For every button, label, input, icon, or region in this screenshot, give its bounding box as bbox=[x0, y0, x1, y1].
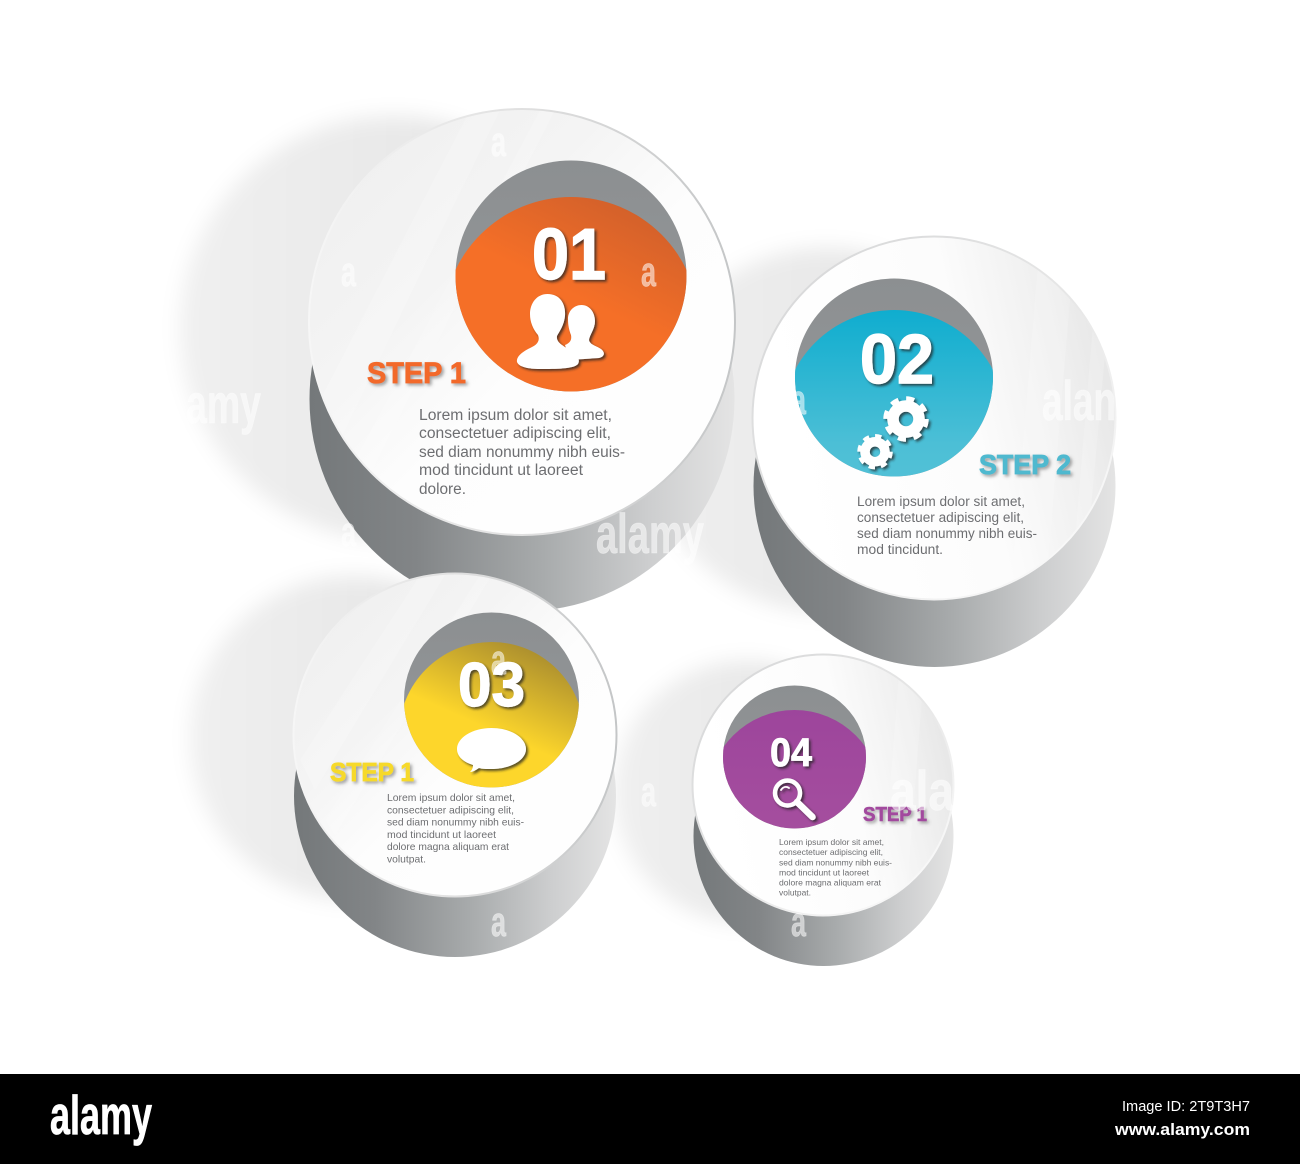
purple lens 4 bbox=[723, 710, 866, 828]
cut-out hole 3 bbox=[404, 612, 579, 788]
image id: Image ID: 2T9T3H7 bbox=[1122, 1098, 1250, 1115]
panel: step 4 bbox=[692, 654, 954, 966]
text block 4: sed diam nonummy nibh euis- bbox=[779, 858, 892, 868]
website: www.alamy.com bbox=[1114, 1120, 1250, 1139]
number 02: 02 bbox=[860, 320, 934, 398]
text block 4: mod tincidunt ut laoreet bbox=[779, 868, 870, 878]
watermarks: a bbox=[491, 898, 506, 945]
cylinder side 2 bbox=[754, 305, 1116, 667]
icon: speech bubble bbox=[457, 728, 526, 772]
text block 3: mod tincidunt ut laoreet bbox=[387, 830, 496, 841]
number 01: 01 bbox=[532, 215, 606, 295]
watermarks: a bbox=[341, 508, 356, 555]
footer logo: alamy bbox=[50, 1084, 152, 1146]
top disc 2 bbox=[752, 236, 1116, 600]
text block 3: Lorem ipsum dolor sit amet, bbox=[387, 793, 515, 804]
text block 1: consectetuer adipiscing elit, bbox=[419, 425, 611, 442]
step label 2: STEP 2 bbox=[979, 449, 1071, 480]
text block 2: consectetuer adipiscing elit, bbox=[857, 510, 1024, 525]
cut-out hole 4 bbox=[723, 686, 866, 828]
top disc 3 bbox=[294, 574, 616, 896]
top disc 4 bbox=[692, 654, 954, 916]
cylinder side 3 bbox=[294, 635, 616, 957]
text block 4: dolore magna aliquam erat bbox=[779, 878, 882, 888]
soft disc shadows bbox=[180, 116, 1007, 923]
cut-out hole 2 bbox=[795, 278, 993, 476]
step label 3: STEP 1 bbox=[330, 757, 414, 787]
text block 1 bbox=[419, 407, 625, 498]
disc streaks 2 bbox=[1010, 240, 1110, 600]
text block 4: Lorem ipsum dolor sit amet, bbox=[779, 837, 884, 847]
watermarks: ala bbox=[890, 759, 955, 822]
icon: gears bbox=[860, 399, 926, 467]
step label 4: STEP 1 bbox=[863, 804, 927, 826]
number 03: 03 bbox=[458, 651, 525, 720]
panel: step 3 bbox=[294, 574, 616, 957]
number 04: 04 bbox=[770, 731, 813, 775]
watermarks: amy bbox=[186, 372, 261, 435]
watermarks: a bbox=[791, 898, 806, 945]
cylinder side 4 bbox=[694, 706, 954, 966]
disc streaks 3 bbox=[300, 575, 492, 835]
text block 1: dolore. bbox=[419, 481, 466, 498]
disc streaks 1 bbox=[320, 110, 555, 490]
text block 2: mod tincidunt. bbox=[857, 542, 943, 557]
text block 1: Lorem ipsum dolor sit amet, bbox=[419, 407, 612, 424]
watermarks bbox=[186, 118, 1116, 945]
text block 2: Lorem ipsum dolor sit amet, bbox=[857, 494, 1025, 509]
cylinder side 1 bbox=[310, 186, 734, 612]
yellow lens 3 bbox=[404, 642, 579, 788]
cut-out hole 1 bbox=[456, 160, 686, 392]
top disc 1 bbox=[309, 109, 735, 535]
icon: people bbox=[517, 294, 604, 369]
disc streaks 4 bbox=[880, 660, 925, 915]
orange lens 1 bbox=[456, 197, 686, 392]
footer bar bbox=[0, 1074, 1300, 1164]
watermarks: a bbox=[791, 376, 806, 423]
text block 3: sed diam nonummy nibh euis- bbox=[387, 818, 524, 828]
watermarks: a bbox=[491, 636, 506, 683]
text block 4: volutpat. bbox=[779, 888, 811, 898]
text block 3: dolore magna aliquam erat bbox=[387, 842, 509, 853]
icon: magnifier bbox=[775, 780, 812, 817]
text block 1: sed diam nonummy nibh euis- bbox=[419, 444, 625, 461]
text block 4: consectetuer adipiscing elit, bbox=[779, 847, 883, 857]
text block 3 bbox=[387, 793, 524, 866]
blue lens 2 bbox=[795, 310, 993, 476]
text block 1: mod tincidunt ut laoreet bbox=[419, 462, 584, 479]
text block 3: volutpat. bbox=[387, 854, 426, 866]
panel: step 1 bbox=[309, 109, 735, 612]
panel: step 2 bbox=[752, 236, 1116, 667]
watermarks: a bbox=[641, 248, 656, 295]
watermarks: a bbox=[641, 768, 656, 815]
text block 2 bbox=[857, 494, 1037, 557]
watermarks: a bbox=[491, 118, 506, 165]
watermarks: alan bbox=[1042, 369, 1116, 432]
step label 1: STEP 1 bbox=[367, 357, 466, 390]
text block 3: consectetuer adipiscing elit, bbox=[387, 806, 514, 816]
text block 4 bbox=[779, 837, 892, 898]
watermarks: alamy bbox=[596, 502, 704, 565]
text block 2: sed diam nonummy nibh euis- bbox=[857, 526, 1037, 541]
watermarks: a bbox=[341, 248, 356, 295]
